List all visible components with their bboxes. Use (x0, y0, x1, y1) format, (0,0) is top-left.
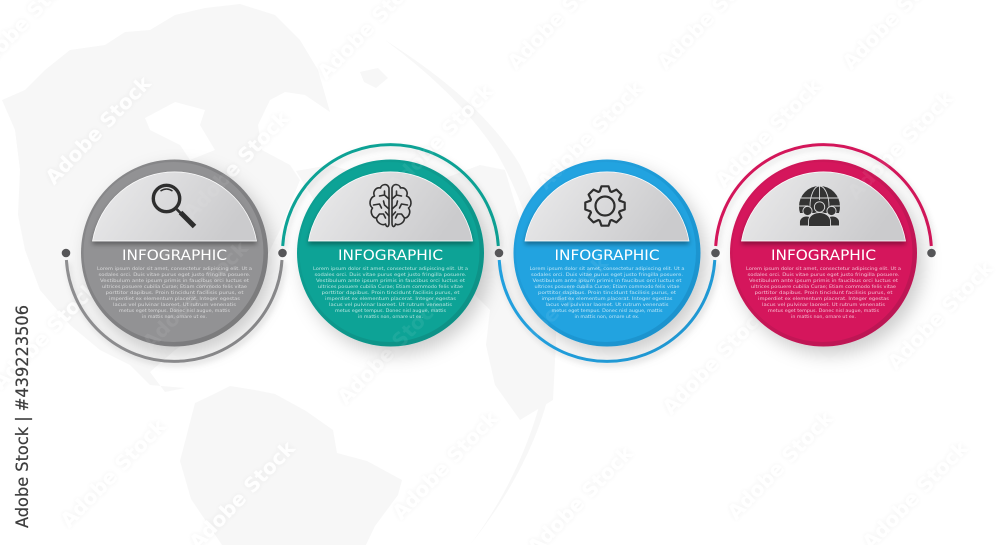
circle: pink (730, 160, 917, 346)
faint watermarks over panels: Adobe Stock (382, 79, 498, 197)
body text: Vestibulum ante ipsum primis in faucibus orci luctus et (749, 278, 898, 284)
faint watermarks over panels: Adobe Stock (497, 251, 613, 369)
body text: porttitor dapibus. Proin tincidunt facilisis purus, et (538, 290, 676, 296)
body text: metus eget tempus. Donec nisl augue, mattis (335, 308, 447, 314)
stock watermarks on background: Adobe Stock (40, 71, 156, 189)
circle: teal (297, 160, 484, 346)
heading: INFOGRAPHIC (122, 247, 227, 264)
circle: gray (81, 160, 268, 346)
body text: lacus vel pulvinar laoreet. Ut rutrum venenatis (546, 302, 669, 308)
connector dots (62, 249, 936, 257)
icon: gear (585, 186, 625, 226)
body text: ultrices posuere cubilia Curae; Etiam commodo felis vitae (751, 284, 896, 290)
body text: in mattis non, ornare ut ex. (358, 314, 423, 320)
faint watermarks over panels: Adobe Stock (332, 291, 448, 409)
body text (746, 266, 901, 320)
arc: teal top (283, 145, 498, 246)
body text: Lorem ipsum dolor sit amet, consectetur adipiscing elit. Ut a (97, 266, 252, 272)
faint watermarks over panels: Adobe Stock (710, 74, 826, 192)
body text: lacus vel pulvinar laoreet. Ut rutrum venenatis (762, 302, 886, 308)
body text: ultrices posuere cubilia Curae; Etiam commodo felis vitae (318, 284, 463, 290)
heading: INFOGRAPHIC (338, 247, 443, 264)
body text: sodales orci. Duis vitae purus eget justo fringilla posuere. (314, 272, 466, 278)
body text: sodales orci. Duis vitae purus eget justo fringilla posuere. (748, 272, 900, 278)
half disc: teal panel (308, 172, 472, 241)
circle: blue (514, 160, 700, 346)
body text: lacus vel pulvinar laoreet. Ut rutrum venenatis (113, 302, 237, 308)
icon: magnifying glass (153, 185, 194, 226)
body text: porttitor dapibus. Proin tincidunt facilisis purus, et (754, 290, 893, 296)
body text: sodales orci. Duis vitae purus eget justo fringilla posuere. (531, 272, 683, 278)
body text: Vestibulum ante ipsum primis in faucibus orci luctus et (316, 278, 465, 284)
stock id vertical text: Adobe Stock | #439223506 (13, 305, 33, 528)
body text: imperdiet ex elementum placerat. Integer egestas (325, 296, 457, 302)
body text: Lorem ipsum dolor sit amet, consectetur adipiscing elit. Ut a (746, 266, 901, 272)
faint watermarks over panels: Adobe Stock (178, 106, 294, 224)
stock watermarks on background: Adobe Stock (710, 74, 826, 192)
body text: ultrices posuere cubilia Curae; Etiam commodo felis vitae (102, 284, 247, 290)
heading: INFOGRAPHIC (771, 247, 876, 264)
panel 4: pink (716, 145, 931, 346)
body text: imperdiet ex elementum placerat. Integer egestas (542, 296, 673, 302)
panel 1: gray (66, 160, 282, 361)
faint watermarks over panels: Adobe Stock (532, 76, 648, 194)
body text: Vestibulum ante ipsum primis in faucibus orci luctus et (100, 278, 249, 284)
body text: metus eget tempus. Donec nisl augue, mattis (119, 308, 231, 314)
stock watermarks on background: Adobe Stock (657, 301, 773, 419)
panel 2: teal (283, 145, 498, 346)
body text: in mattis non, ornare ut ex. (574, 314, 640, 320)
body text: porttitor dapibus. Proin tincidunt facilisis purus, et (322, 290, 460, 296)
body text: in mattis non, ornare ut ex. (142, 314, 207, 320)
stock watermarks on background: Adobe Stock (55, 414, 171, 532)
stock watermarks on background: Adobe Stock (382, 79, 498, 197)
body text: ultrices posuere cubilia Curae; Etiam commodo felis vitae (534, 284, 680, 290)
stock watermarks on background: Adobe Stock (178, 106, 294, 224)
panel 3: blue (499, 160, 715, 361)
icon: globe with people (799, 186, 840, 227)
body text (313, 266, 468, 320)
stock watermarks on background: Adobe Stock (332, 291, 448, 409)
body text: Vestibulum ante ipsum primis in faucibus orci luctus et (532, 278, 682, 284)
body text: Lorem ipsum dolor sit amet, consectetur adipiscing elit. Ut a (313, 266, 468, 272)
body text: sodales orci. Duis vitae purus eget justo fringilla posuere. (98, 272, 250, 278)
body text: lacus vel pulvinar laoreet. Ut rutrum venenatis (329, 302, 453, 308)
stock watermarks on background: Adobe Stock (722, 406, 838, 524)
arc: pink top (716, 145, 931, 246)
body text: metus eget tempus. Donec nisl augue, mattis (551, 308, 663, 314)
world map background (2, 4, 556, 545)
arc: gray bottom (66, 260, 282, 361)
half disc: gray panel (92, 172, 256, 241)
body text (97, 266, 252, 320)
stock watermarks on background: Adobe Stock (532, 76, 648, 194)
half disc: blue panel (525, 172, 689, 241)
stock watermarks on background: Adobe Stock (387, 406, 503, 524)
faint watermarks over panels (137, 74, 958, 409)
stock watermarks on background: Adobe Stock (842, 86, 958, 204)
body text: in mattis non, ornare ut ex. (791, 314, 856, 320)
arc: blue bottom (499, 260, 715, 361)
half disc: pink panel (742, 172, 906, 241)
faint watermarks over panels: Adobe Stock (842, 86, 958, 204)
heading: INFOGRAPHIC (554, 247, 660, 264)
icon: brain (370, 185, 411, 227)
body text: Lorem ipsum dolor sit amet, consectetur adipiscing elit. Ut a (530, 266, 685, 272)
faint watermarks over panels: Adobe Stock (137, 236, 253, 354)
body text: porttitor dapibus. Proin tincidunt facilisis purus, et (106, 290, 244, 296)
body text: imperdiet ex elementum placerat. Integer egestas (109, 296, 241, 302)
body text (530, 266, 685, 320)
body text: metus eget tempus. Donec nisl augue, mattis (768, 308, 880, 314)
body text: imperdiet ex elementum placerat. Integer egestas (758, 296, 890, 302)
stock watermarks on background: Adobe Stock (882, 256, 998, 374)
